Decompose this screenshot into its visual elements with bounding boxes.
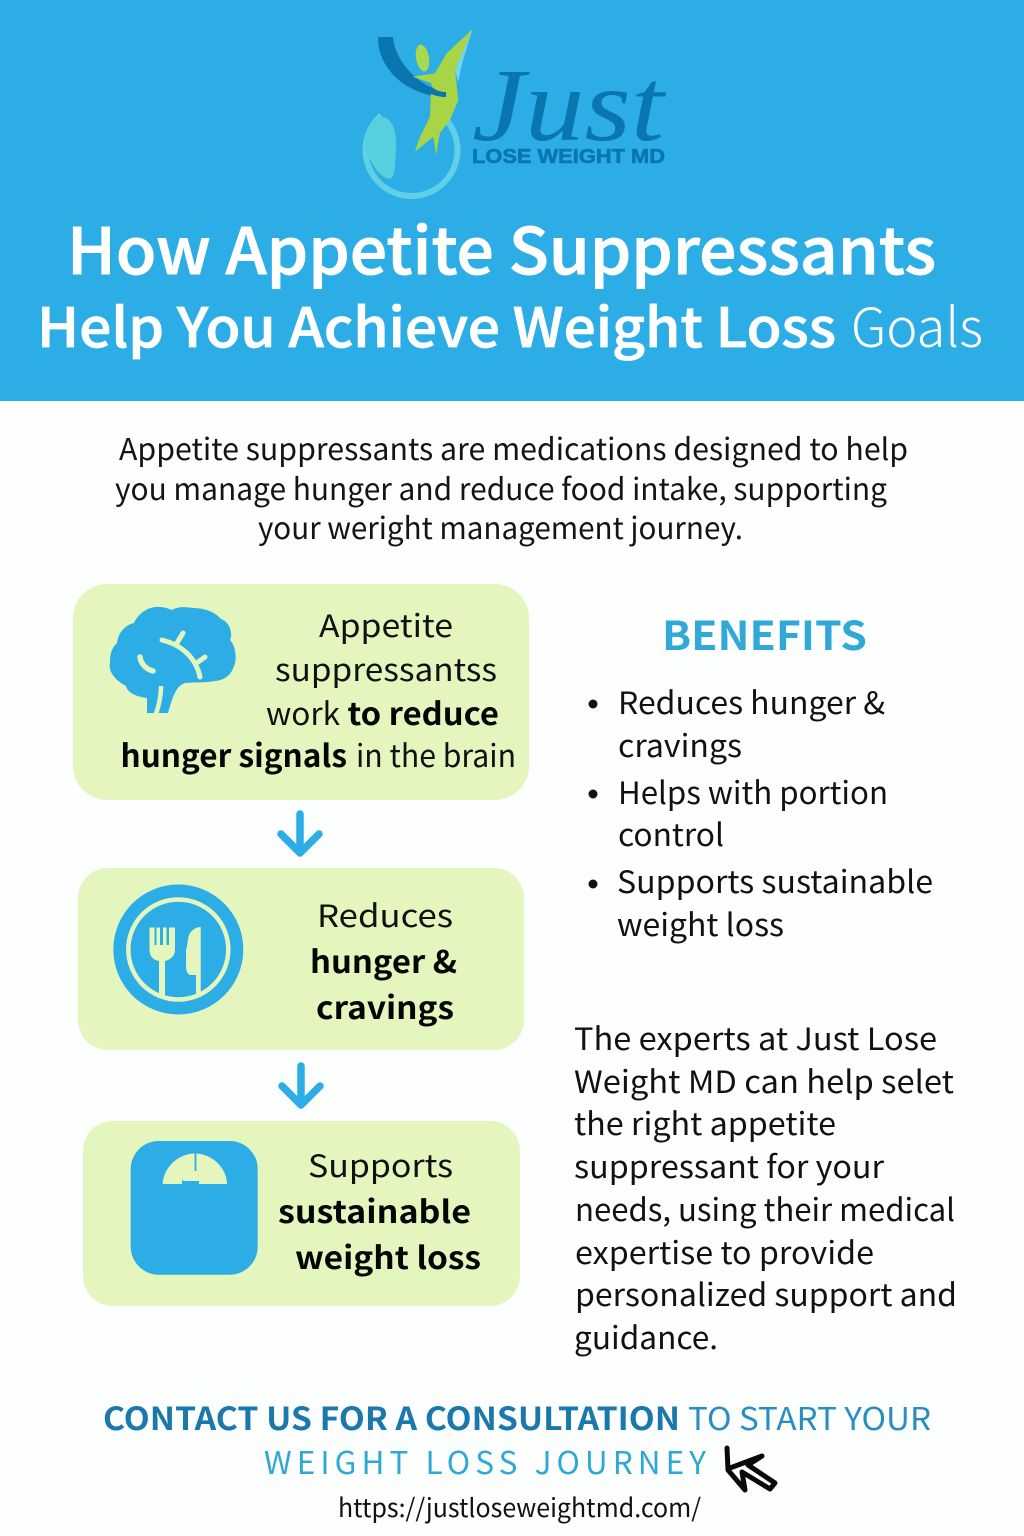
call to action: TO START YOUR (688, 1394, 931, 1440)
panel text: work (266, 689, 340, 734)
icon: logo figure (347, 29, 476, 215)
benefit: reduces hunger: Reduces hunger & (618, 678, 885, 723)
panel text: in the brain (356, 731, 516, 776)
title: Help You Achieve Weight Loss (37, 284, 836, 363)
intro text: you manage hunger and reduce food intake, supporting (115, 465, 887, 509)
icon: plate with fork and knife (113, 884, 243, 1014)
header banner (0, 0, 1024, 401)
panel text (120, 601, 516, 776)
panel text (278, 1141, 481, 1278)
benefit: sustainable weight loss (588, 857, 933, 945)
logo (347, 29, 666, 215)
experts paragraph: The experts at Just Lose (574, 1014, 937, 1059)
call to action: CONTACT US FOR A CONSULTATION (103, 1394, 680, 1440)
panel text: weight loss (295, 1233, 481, 1278)
call to action (103, 1394, 931, 1484)
benefit: reduces hunger (588, 678, 885, 766)
experts paragraph (574, 1014, 957, 1358)
panel text: sustainable (278, 1187, 471, 1232)
arrow down 2 (282, 1066, 320, 1105)
benefit: sustainable weight loss: Supports sustainable (617, 857, 933, 902)
panel: supports sustainable weight loss (83, 1121, 520, 1306)
panel text: hunger & (310, 937, 457, 982)
panel text (310, 891, 457, 1028)
call to action: WEIGHT LOSS JOURNEY (264, 1438, 706, 1484)
panel text: cravings (316, 983, 454, 1028)
panel: hunger signals in the brain (73, 584, 529, 800)
benefit: portion control (588, 768, 888, 855)
title (37, 201, 983, 363)
benefits heading: BENEFITS (662, 604, 867, 662)
icon: weighing scale (131, 1141, 258, 1275)
experts paragraph: the right appetite (574, 1099, 836, 1144)
benefits list (588, 678, 933, 945)
intro text: Appetite suppressants are medications designed to help (119, 425, 908, 469)
intro text: your weright management journey. (258, 504, 743, 548)
intro text (115, 425, 908, 548)
experts paragraph: Weight MD can help selet (574, 1057, 954, 1102)
experts paragraph: guidance. (574, 1313, 718, 1358)
logo wordmark: Just: Just (472, 48, 666, 163)
benefit: portion control: control (618, 810, 724, 855)
arrow down 1 (281, 814, 319, 853)
panel: reduces hunger and cravings (78, 868, 524, 1050)
title: Goals (851, 284, 983, 363)
panel text: to reduce (348, 689, 499, 734)
panel text: Reduces (317, 891, 453, 936)
panel text: suppressantss (275, 645, 497, 690)
experts paragraph: personalized support and (575, 1270, 957, 1315)
panel text: Supports (308, 1141, 453, 1186)
panel text: Appetite (319, 601, 453, 646)
title: How Appetite Suppressants (67, 201, 936, 293)
website url: https://justloseweightmd.com/ (338, 1488, 701, 1525)
experts paragraph: suppressant for your (574, 1142, 885, 1187)
benefit: portion control: Helps with portion (618, 768, 888, 813)
logo wordmark: Lose Weight MD: LOSE WEIGHT MD (472, 146, 665, 168)
experts paragraph: expertise to provide (575, 1228, 874, 1273)
experts paragraph: needs, using their medical (575, 1185, 955, 1230)
benefit: sustainable weight loss: weight loss (617, 900, 784, 945)
icon: brain (110, 607, 236, 714)
icon: cursor arrow (727, 1448, 775, 1490)
panel text: hunger signals (120, 731, 347, 776)
benefit: reduces hunger: cravings (618, 721, 742, 766)
